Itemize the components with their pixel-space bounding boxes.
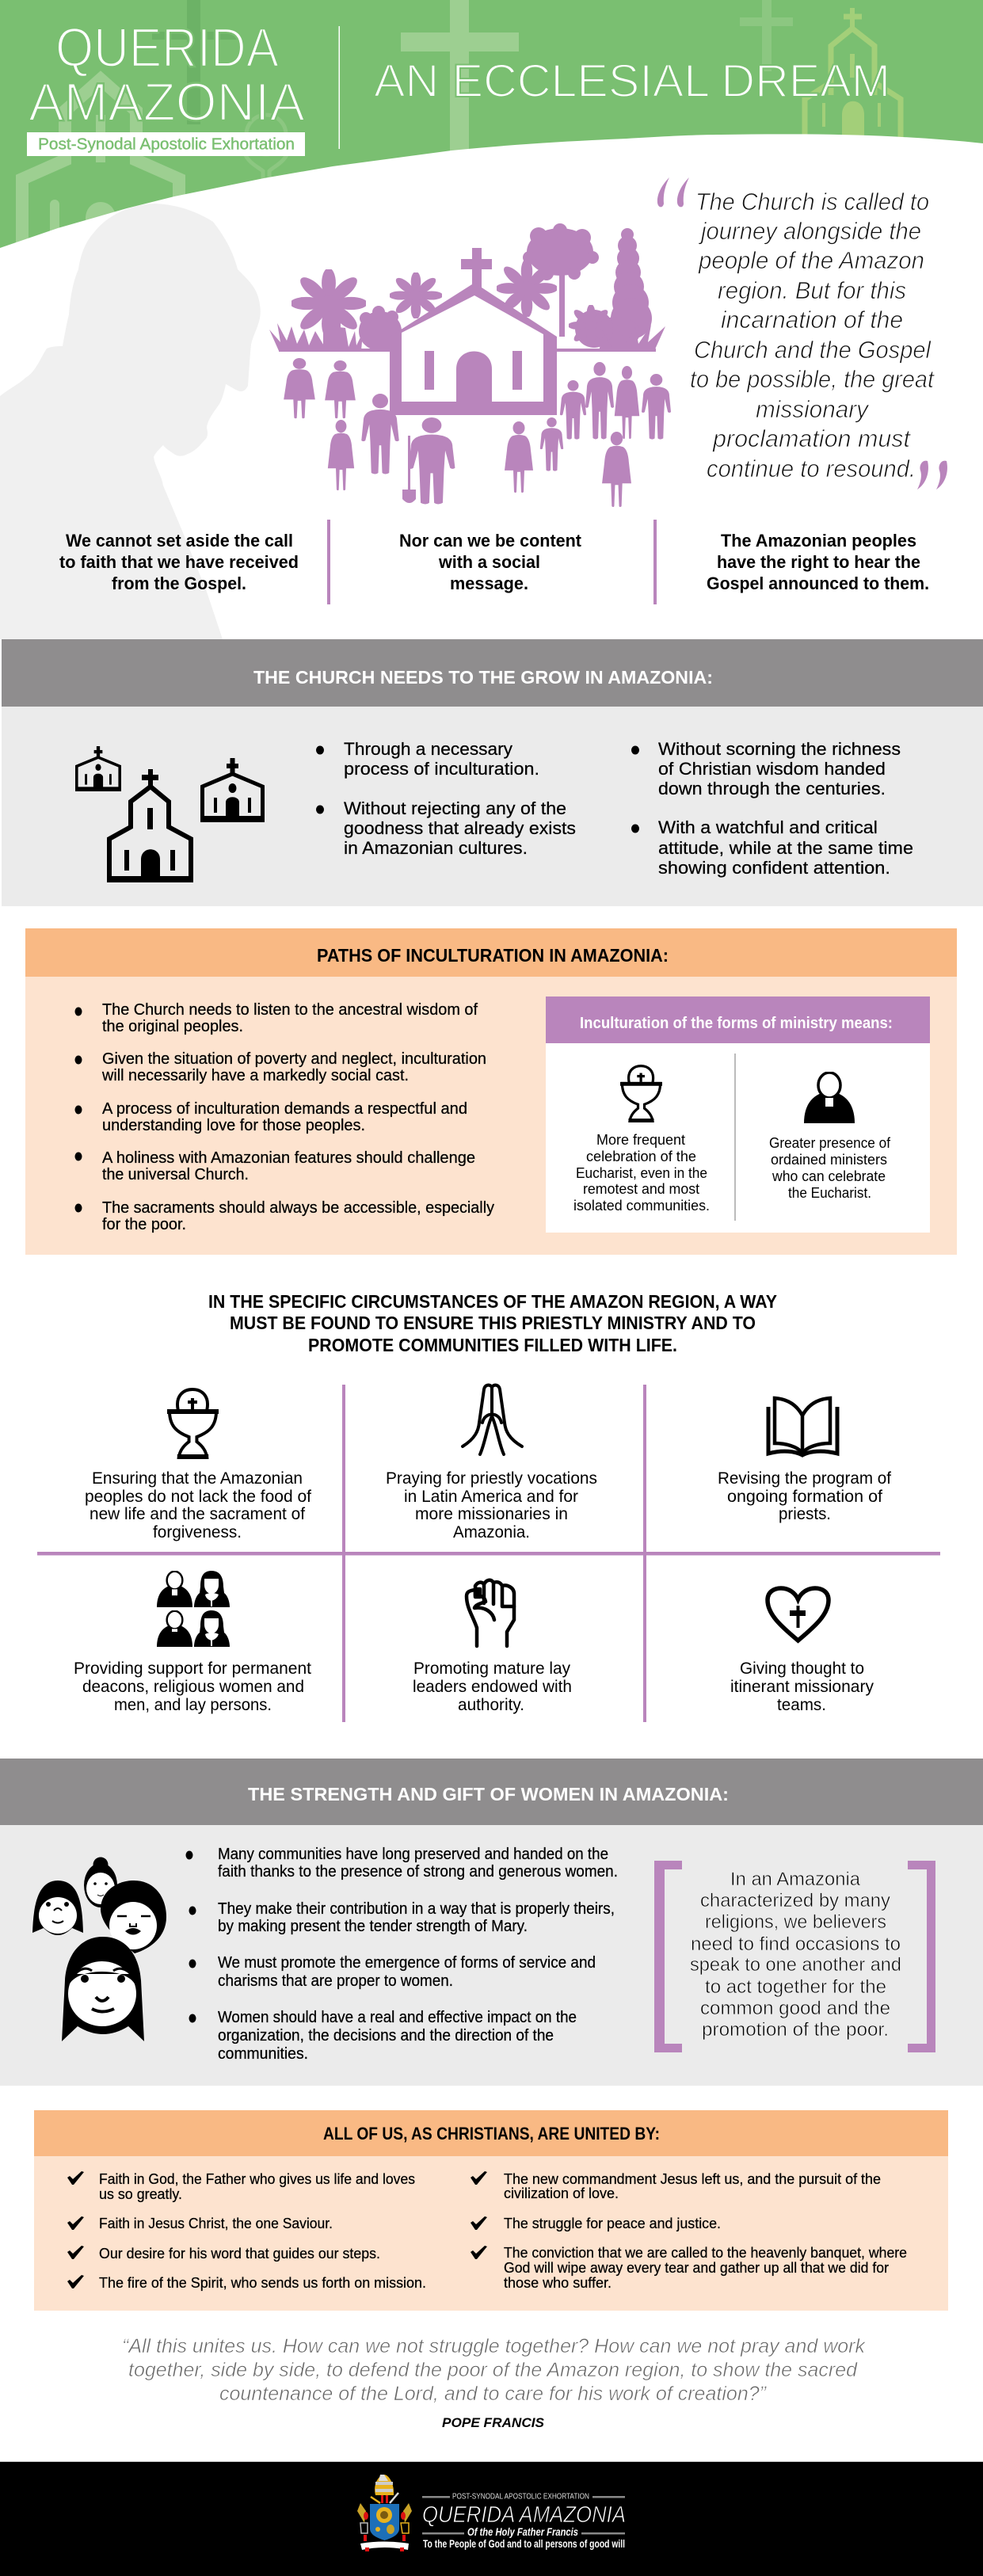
bullet list: We must promote the emergence of forms of service and: [218, 1954, 596, 1972]
people: [284, 358, 671, 507]
statement text: common good and the: [700, 1998, 890, 2019]
panel: paths of inculturation: [25, 928, 957, 1255]
heading: ALL OF US, AS CHRISTIANS, ARE UNITED BY:: [323, 2124, 660, 2143]
footer: [0, 2461, 983, 2576]
bullet list: Women should have a real and effective impact on the: [218, 2009, 577, 2026]
bullet list: [74, 1001, 494, 1233]
column 3: The Amazonian peoples: [721, 531, 916, 551]
item: support for deacons and lay persons: men, and lay persons.: [114, 1696, 272, 1714]
bullets left: process of inculturation.: [344, 759, 539, 779]
bullets left: in Amazonian cultures.: [344, 838, 528, 858]
front face: [62, 1937, 144, 2041]
title: Querida Amazonia: [29, 17, 306, 132]
ordained text: [769, 1134, 891, 1201]
closing quote: together, side by side, to defend the poor of the Amazon region, to show the sacred: [128, 2359, 858, 2381]
quote: the Church is called: missionary: [756, 395, 870, 423]
eucharist text: Eucharist, even in the: [576, 1164, 707, 1181]
item: mature lay leaders: Promoting mature lay: [413, 1660, 570, 1678]
closing quote: “All this unites us. How can we not struggle together? How can we not pray and work: [122, 2335, 866, 2357]
icon: women faces: [32, 1857, 166, 2041]
background church right: [805, 8, 901, 139]
heading: specific circumstances: PROMOTE COMMUNITIES FILLED WITH LIFE.: [308, 1335, 677, 1355]
eucharist text: More frequent: [596, 1131, 685, 1148]
item: ongoing formation: priests.: [779, 1505, 831, 1523]
bullet list: The Church needs to listen to the ancestral wisdom of: [102, 1001, 478, 1019]
bullet list: A process of inculturation demands a respectful and: [102, 1100, 467, 1118]
bullets right: attitude, while at the same time: [658, 838, 913, 858]
heading: An Ecclesial Dream: AN ECCLESIAL DREAM: [374, 55, 890, 107]
bullet list: [185, 1846, 618, 2063]
column 1: We cannot set aside the call: [66, 531, 293, 551]
brackets: [654, 1861, 935, 2052]
bullet list: will necessarily have a markedly social cast.: [101, 1067, 409, 1084]
item: ongoing formation: [718, 1398, 891, 1523]
checklist left: [67, 2170, 426, 2291]
icon: praying hands: [463, 1385, 522, 1454]
icon: chalice: [167, 1389, 219, 1459]
bullet list: communities.: [218, 2045, 308, 2063]
eucharist text: isolated communities.: [573, 1197, 710, 1214]
left face: [32, 1881, 83, 1935]
bullet list: the universal Church.: [102, 1166, 249, 1183]
item: mature lay leaders: [413, 1580, 572, 1714]
church: [390, 248, 557, 415]
bullets left: goodness that already exists: [344, 818, 576, 838]
footer title block: POST-SYNODAL APOSTOLIC EXHORTATION: [452, 2492, 589, 2502]
heading: THE CHURCH NEEDS TO THE GROW IN AMAZONIA:: [253, 667, 713, 688]
right face: [101, 1881, 166, 1953]
bullet list: A holiness with Amazonian features should challenge: [102, 1149, 475, 1167]
eucharist text: [573, 1131, 710, 1214]
item: itinerant missionary teams: itinerant missionary: [730, 1678, 874, 1696]
icon: chalice: [620, 1066, 662, 1122]
bullets right: [631, 739, 913, 878]
footer title block: To the People of God and to all persons of good will: [423, 2538, 625, 2550]
checklist left: Faith in God, the Father who gives us life and loves: [99, 2170, 415, 2187]
bullets right: down through the centuries.: [658, 779, 886, 798]
checklist left: Faith in Jesus Christ, the one Saviour.: [99, 2215, 333, 2231]
closing quote mark: [917, 461, 947, 490]
statement text: In an Amazonia: [730, 1869, 860, 1890]
icon: four figures: [157, 1571, 230, 1647]
column 2: with a social: [438, 552, 540, 572]
statement columns: [59, 531, 929, 593]
item: priestly vocations: Praying for priestly vocations: [386, 1469, 597, 1488]
bullet list: by making present the tender strength of Mary.: [218, 1918, 528, 1935]
bullets right: showing confident attention.: [658, 858, 890, 878]
bullet list: charisms that are proper to women.: [218, 1972, 453, 1990]
checklist right: civilization of love.: [504, 2185, 619, 2201]
panel: strength and gift of women: [0, 1759, 983, 2086]
item: food of new life: forgiveness.: [153, 1523, 242, 1541]
bullets left: Without rejecting any of the: [344, 798, 566, 818]
item: itinerant missionary teams: [730, 1588, 874, 1714]
checklist right: [471, 2170, 907, 2291]
column 1: [59, 531, 299, 593]
statement text: need to find occasions to: [691, 1934, 901, 1955]
checklist right: The conviction that we are called to the heavenly banquet, where: [504, 2244, 907, 2261]
item: itinerant missionary teams: Giving thought to: [740, 1660, 864, 1678]
bullet list: Given the situation of poverty and neglect, inculturation: [102, 1050, 486, 1068]
bullet list: understanding love for those peoples.: [102, 1117, 365, 1134]
card: forms of ministry: Inculturation of the forms of ministry means:: [580, 1015, 893, 1032]
quote: the Church is called: people of the Amazon: [698, 246, 924, 274]
bracketed statement: [654, 1861, 935, 2052]
statement text: promotion of the poor.: [702, 2019, 889, 2041]
bullet list: for the poor.: [102, 1216, 186, 1233]
card: forms of ministry: [546, 996, 930, 1233]
column 1: to faith that we have received: [59, 552, 299, 572]
eucharist text: remotest and most: [583, 1180, 699, 1197]
heading: specific circumstances: [208, 1291, 777, 1355]
icon: open book: [768, 1398, 837, 1455]
checklist right: The new commandment Jesus left us, and the pursuit of the: [504, 2170, 881, 2187]
bullets left: [316, 739, 576, 858]
background chalice: [242, 115, 290, 186]
item: priestly vocations: Amazonia.: [453, 1523, 530, 1541]
item: priestly vocations: [386, 1385, 597, 1541]
checklist left: The fire of the Spirit, who sends us forth on mission.: [99, 2274, 426, 2291]
footer title block: QUERIDA AMAZONIA: [422, 2502, 626, 2528]
trees and plants: [269, 223, 665, 352]
icon: priest: [804, 1073, 855, 1123]
footer title block: Of the Holy Father Francis: [467, 2525, 578, 2538]
checklist right: God will wipe away every tear and gather up all that we did for: [504, 2259, 889, 2276]
icon: raised fist: [467, 1580, 514, 1646]
item: food of new life: [85, 1389, 311, 1541]
quote: the Church is called: region. But for this: [718, 276, 906, 304]
quote: the Church is called: to be possible, the great: [690, 365, 935, 393]
item: priestly vocations: more missionaries in: [415, 1505, 568, 1523]
bullet list: the original peoples.: [102, 1018, 243, 1035]
heading: specific circumstances: MUST BE FOUND TO ENSURE THIS PRIESTLY MINISTRY AND TO: [230, 1313, 756, 1333]
subtitle label: Post-Synodal Apostolic Exhortation: [38, 136, 295, 154]
icon: churches: [75, 746, 265, 882]
title: Querida Amazonia: QUERIDA: [55, 17, 279, 78]
attribution: POPE FRANCIS: [442, 2415, 545, 2430]
item: support for deacons and lay persons: Providing support for permanent: [74, 1660, 311, 1678]
white curve: [0, 134, 983, 261]
quote: the Church is called: continue to resound.: [707, 455, 916, 482]
footer title block: [422, 2492, 626, 2550]
opening quote mark: [657, 177, 689, 207]
column 2: [399, 531, 582, 593]
bullet list: faith thanks to the presence of strong and generous women.: [218, 1863, 618, 1881]
checklist right: The struggle for peace and justice.: [504, 2215, 721, 2231]
item: food of new life: Ensuring that the Amazonian: [92, 1469, 303, 1488]
item: support for deacons and lay persons: [74, 1571, 311, 1714]
item: food of new life: new life and the sacrament of: [90, 1505, 305, 1523]
column 2: message.: [450, 574, 528, 593]
item: itinerant missionary teams: teams.: [777, 1696, 826, 1714]
ordained text: Greater presence of: [769, 1134, 891, 1151]
illustration: church and community: [269, 223, 671, 507]
bullets left: Through a necessary: [344, 739, 513, 759]
column 3: [707, 531, 929, 593]
checklist left: Our desire for his word that guides our steps.: [99, 2245, 380, 2262]
column 3: Gospel announced to them.: [707, 574, 929, 593]
statement text: characterized by many: [700, 1890, 891, 1911]
item: ongoing formation: ongoing formation of: [727, 1488, 882, 1506]
background cross motif: [152, 0, 793, 158]
closing quote: countenance of the Lord, and to care for his work of creation?”: [219, 2383, 768, 2405]
item: food of new life: peoples do not lack the food of: [85, 1488, 311, 1506]
grid lines: [37, 1385, 940, 1722]
item: ongoing formation: Revising the program of: [718, 1469, 891, 1488]
background church left: [22, 79, 179, 253]
bullets right: With a watchful and critical: [658, 817, 878, 837]
item: mature lay leaders: authority.: [458, 1696, 524, 1714]
quote: the Church is called: The Church is called to: [695, 188, 929, 215]
checklist left: us so greatly.: [99, 2185, 182, 2202]
icon: heart with cross: [768, 1588, 829, 1640]
quote: the Church is called: incarnation of the: [721, 306, 903, 333]
item: mature lay leaders: leaders endowed with: [413, 1678, 572, 1696]
header divider: [339, 26, 340, 149]
ordained text: the Eucharist.: [788, 1184, 871, 1201]
column 3: have the right to hear the: [717, 552, 920, 572]
pope silhouette: [0, 204, 261, 639]
column 1: from the Gospel.: [112, 574, 246, 593]
quote: the Church is called: [690, 188, 935, 482]
bullet list: The sacraments should always be accessible, especially: [102, 1199, 494, 1217]
bullet list: They make their contribution in a way that is properly theirs,: [218, 1900, 615, 1918]
bullets right: of Christian wisdom handed: [658, 759, 886, 779]
eucharist text: celebration of the: [586, 1148, 696, 1164]
subtitle label: [27, 132, 305, 156]
heading: specific circumstances: IN THE SPECIFIC CIRCUMSTANCES OF THE AMAZON REGION, A WAY: [208, 1291, 777, 1312]
heading: THE STRENGTH AND GIFT OF WOMEN IN AMAZONIA:: [248, 1784, 729, 1804]
closing quote: [122, 2335, 866, 2405]
item: priestly vocations: in Latin America and for: [404, 1488, 578, 1506]
icon: papal coat of arms: [357, 2475, 412, 2551]
panel: all of us united: [34, 2110, 948, 2311]
column 2: Nor can we be content: [399, 531, 582, 551]
header banner: [0, 0, 983, 261]
quote: the Church is called: Church and the Gospel: [694, 336, 932, 364]
quote: the Church is called: journey alongside the: [698, 217, 921, 245]
top small face: [84, 1857, 117, 1907]
item: support for deacons and lay persons: deacons, religious women and: [82, 1678, 304, 1696]
statement text: [690, 1869, 901, 2041]
ordained text: who can celebrate: [772, 1168, 886, 1184]
statement text: to act together for the: [705, 1976, 886, 1998]
statement text: religions, we believers: [705, 1911, 886, 1933]
bullets right: Without scorning the richness: [658, 739, 901, 759]
heading: PATHS OF INCULTURATION IN AMAZONIA:: [317, 945, 669, 966]
statement text: speak to one another and: [690, 1954, 901, 1976]
title: Querida Amazonia: AMAZONIA: [29, 72, 306, 132]
checklist right: those who suffer.: [504, 2274, 612, 2291]
quote: the Church is called: proclamation must: [712, 425, 911, 452]
ordained text: ordained ministers: [771, 1151, 887, 1168]
panel: the Church needs to grow: [2, 639, 983, 906]
bullet list: organization, the decisions and the direction of the: [218, 2027, 554, 2044]
bullet list: Many communities have long preserved and handed on the: [218, 1846, 608, 1863]
